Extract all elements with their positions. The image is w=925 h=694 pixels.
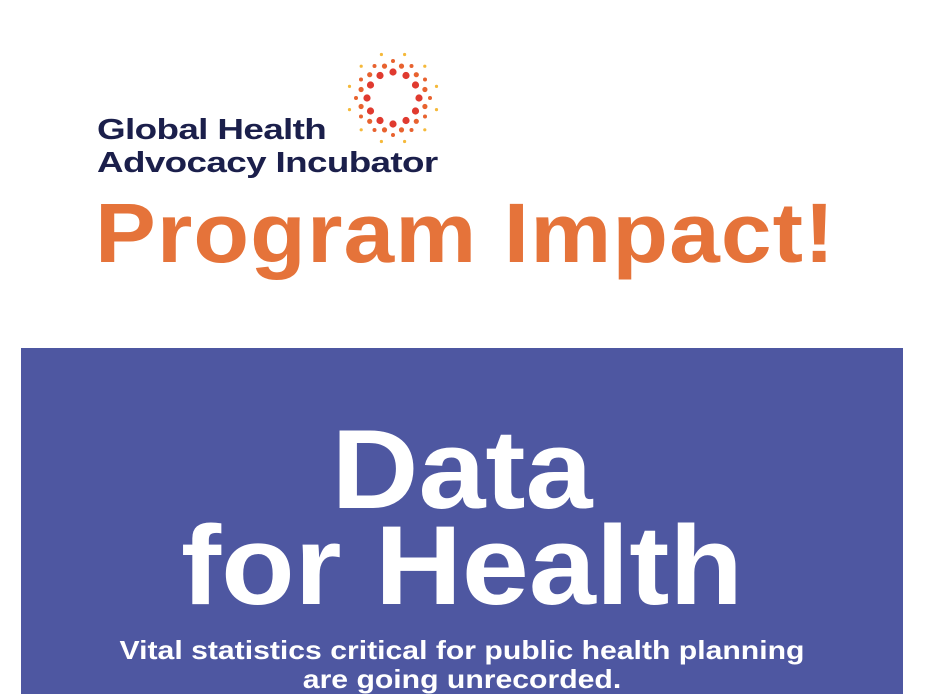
logo: organization name (97, 114, 438, 179)
panel: data for health (21, 348, 903, 694)
title: Program Impact!: Program Impact! (95, 186, 836, 280)
logo: organization name: Global Health (97, 114, 326, 146)
subtitle text: Vital statistics critical for public health planning (120, 635, 804, 665)
heading: Data for Health: Data (332, 407, 592, 532)
heading: Data for Health: for Health (181, 503, 743, 628)
logo: sunburst icon (348, 52, 438, 144)
logo: organization name: Advocacy Incubator (97, 147, 438, 179)
heading: Data for Health (181, 407, 743, 628)
subtitle text (120, 635, 804, 694)
subtitle text: are going unrecorded. (303, 664, 621, 694)
